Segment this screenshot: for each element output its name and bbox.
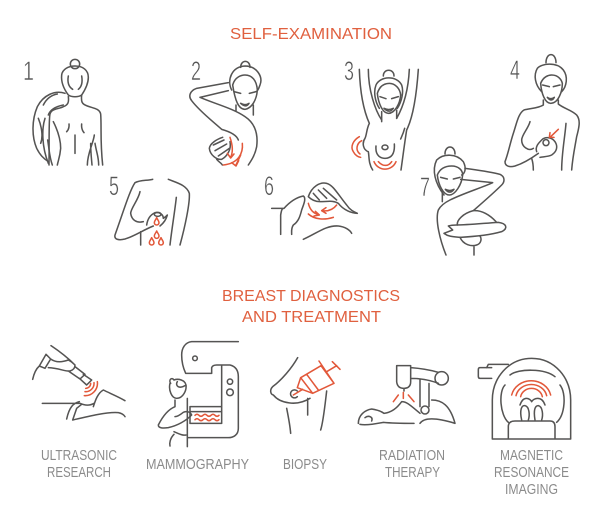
label: radiation therapy: RADIATION <box>379 448 445 464</box>
heading: self-examination: SELF-EXAMINATION <box>230 26 392 43</box>
step number 4: 4 <box>510 55 520 85</box>
icon: radiation therapy <box>358 366 455 425</box>
step number 5: 5 <box>109 171 119 201</box>
figure 5 <box>115 179 189 245</box>
figure 2 <box>190 61 261 166</box>
figure 3 <box>352 69 418 170</box>
label: magnetic resonance imaging: IMAGING <box>505 482 558 498</box>
heading: breast diagnostics and treatment: BREAST DIAGNOSTICS <box>222 288 400 305</box>
step number 1: 1 <box>23 56 34 86</box>
step 4: fingers pressing nipple <box>505 55 579 170</box>
step 3: arms raised, side arcs <box>344 56 418 170</box>
label: magnetic resonance imaging: RESONANCE <box>494 465 569 481</box>
label: radiation therapy: THERAPY <box>385 465 440 481</box>
label: magnetic resonance imaging: MAGNETIC <box>500 448 563 464</box>
figure 4 <box>505 55 579 170</box>
step 5: discharge check <box>109 171 189 245</box>
label: mammography: MAMMOGRAPHY <box>146 457 249 473</box>
figure 6 <box>272 183 357 239</box>
step number 2: 2 <box>191 56 201 86</box>
icon: biopsy <box>271 358 340 433</box>
icon: mammography <box>158 342 238 447</box>
step number 3: 3 <box>344 56 354 86</box>
label: magnetic resonance imaging <box>494 448 569 498</box>
step 7: arm behind head, breast supported <box>420 147 506 255</box>
heading: breast diagnostics and treatment <box>222 288 400 326</box>
label: biopsy: BIOPSY <box>283 457 327 473</box>
icon: magnetic resonance imaging <box>478 358 571 439</box>
step 2: arm raised, palpation <box>190 56 261 166</box>
heading: breast diagnostics and treatment: AND TREATMENT <box>242 309 381 326</box>
icon: ultrasonic research <box>33 346 125 420</box>
figure 7 <box>434 147 506 255</box>
step 6: palpation lying down <box>264 171 357 239</box>
step 1: visual check from behind mirror <box>23 56 103 165</box>
step number 6: 6 <box>264 171 274 201</box>
label: radiation therapy <box>379 448 445 481</box>
label: ultrasonic research: ULTRASONIC <box>41 448 117 464</box>
step number 7: 7 <box>420 172 430 202</box>
label: ultrasonic research: RESEARCH <box>47 465 111 481</box>
figure 1 <box>33 59 103 165</box>
label: ultrasonic research <box>41 448 117 481</box>
